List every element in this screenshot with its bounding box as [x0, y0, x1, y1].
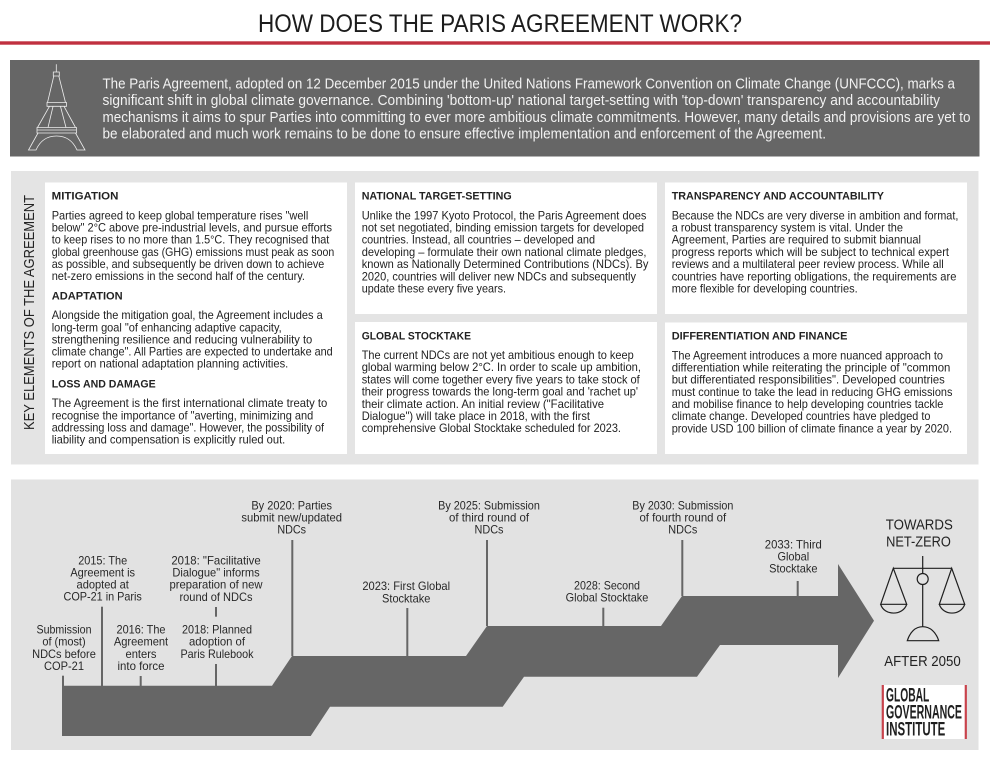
- panel: key elements: [11, 171, 978, 464]
- adaptation text: strengthening resilience and reducing vulnerability to: [52, 334, 313, 347]
- text: more flexible for developing countries.: [672, 282, 858, 296]
- logo: Global Governance Institute: [882, 685, 967, 741]
- milestone: 2018 Facilitative Dialogue: [170, 555, 263, 617]
- milestone: NDC submission: of (most): [42, 636, 86, 649]
- milestone: by 2025: [438, 499, 540, 626]
- milestone: by 2020: By 2020: Parties: [251, 499, 332, 512]
- milestone: 2023: [362, 580, 450, 656]
- mitigation text: global greenhouse gas (GHG) emissions must peak as soon: [52, 246, 334, 259]
- milestone: 2033: Stocktake: [769, 562, 817, 575]
- intro text: be elaborated and much work remains to be done to ensure effective implementation and enforcement of the Agreement.: [102, 126, 826, 142]
- milestone: NDC submission: NDCs before: [32, 648, 96, 661]
- text: a robust transparency system is vital. Under the: [672, 222, 903, 234]
- towards net-zero label: [886, 518, 953, 550]
- milestone: 2015: [64, 554, 142, 686]
- adaptation text: report on national adaptation planning activities.: [52, 358, 288, 371]
- mitigation text: [52, 209, 334, 283]
- text: their progress towards the long-term goal and 'rachet up': [362, 386, 638, 399]
- text: The Agreement introduces a more nuanced approach to: [672, 349, 943, 362]
- milestone: 2018 Facilitative Dialogue: preparation of new: [170, 579, 263, 592]
- logo: Global Governance Institute: GLOBAL: [886, 686, 930, 707]
- adaptation text: [52, 309, 333, 371]
- milestone: 2033: [765, 538, 822, 596]
- text: countries. Instead, all countries – developed and: [362, 234, 595, 247]
- text: [672, 349, 953, 435]
- card: mitigation, adaptation, loss and damage: [45, 182, 347, 454]
- intro text: significant shift in global climate governance. Combining 'bottom-up' national target-setting with 'top-down' transparency and accountability: [102, 93, 941, 109]
- heading: NATIONAL TARGET-SETTING: [362, 191, 512, 203]
- heading: DIFFERENTIATION AND FINANCE: [672, 331, 848, 343]
- mitigation text: as possible, and subsequently be driven down to achieve: [52, 258, 324, 271]
- text: global warming below 2°C. In order to scale up ambition,: [362, 361, 641, 374]
- text: developing – formulate their own national climate pledges,: [362, 246, 646, 259]
- towards net-zero label: TOWARDS: [886, 518, 953, 534]
- milestone: by 2025: NDCs: [474, 524, 504, 537]
- text: provide USD 100 billion of climate finance a year by 2020.: [672, 422, 952, 435]
- adaptation text: Alongside the mitigation goal, the Agreement includes a: [52, 309, 323, 322]
- icon: Eiffel Tower: [28, 64, 85, 150]
- text: The current NDCs are not yet ambitious enough to keep: [362, 349, 634, 362]
- title: HOW DOES THE PARIS AGREEMENT WORK?: [258, 10, 742, 38]
- milestone: 2018 Paris Rulebook: adoption of: [189, 636, 246, 649]
- text: differentiation while reiterating the principle of "common: [672, 362, 950, 374]
- milestone: by 2020: submit new/updated: [241, 512, 342, 525]
- milestone: 2018 Facilitative Dialogue: round of NDCs: [180, 591, 253, 604]
- mitigation text: net-zero emissions in the second half of the century.: [52, 270, 305, 283]
- milestone: 2016: enters: [126, 648, 157, 661]
- milestone: 2023: 2023: First Global: [362, 580, 450, 593]
- mitigation text: below" 2°C above pre-industrial levels, and pursue efforts: [52, 222, 332, 234]
- milestone: NDC submission: COP-21: [44, 660, 84, 673]
- milestone: 2018 Paris Rulebook: 2018: Planned: [182, 624, 252, 637]
- milestone: NDC submission: Submission: [36, 624, 92, 637]
- text: countries have reporting obligations, the requirements are: [672, 270, 956, 283]
- text: Dialogue") will take place in 2018, with the first: [362, 410, 591, 423]
- icon: balance scales: [881, 556, 965, 641]
- text: climate change. Developed countries have pledged to: [672, 410, 931, 423]
- milestone: 2016: Agreement: [114, 636, 169, 649]
- milestone: by 2030: of fourth round of: [639, 512, 727, 525]
- loss and damage text: liability and compensation is explicitly ruled out.: [52, 434, 285, 447]
- intro text: [102, 76, 970, 142]
- card: national target-setting: [355, 182, 657, 314]
- loss and damage text: [52, 397, 328, 447]
- text: Because the NDCs are very diverse in ambition and format,: [672, 209, 958, 222]
- milestone: by 2030: By 2030: Submission: [632, 499, 733, 512]
- milestone: NDC submission: [32, 624, 96, 686]
- milestone: 2015: COP-21 in Paris: [64, 591, 142, 604]
- milestone: by 2020: NDCs: [277, 524, 306, 537]
- text: [672, 209, 958, 296]
- towards net-zero label: NET-ZERO: [886, 534, 951, 550]
- loss and damage heading: LOSS AND DAMAGE: [52, 379, 156, 391]
- milestone: 2018 Paris Rulebook: Paris Rulebook: [180, 648, 254, 661]
- text: their climate action. An initial review ("Facilitative: [362, 398, 604, 411]
- milestone: 2016: 2016: The: [116, 624, 166, 637]
- text: Unlike the 1997 Kyoto Protocol, the Paris Agreement does: [362, 209, 647, 222]
- text: [362, 349, 641, 435]
- milestone: by 2030: NDCs: [668, 524, 697, 537]
- card: global stocktake: [355, 322, 657, 454]
- text: progress reports which will be subject to technical expert: [672, 246, 950, 259]
- card: transparency and accountability: [665, 182, 967, 314]
- heading: GLOBAL STOCKTAKE: [362, 330, 471, 342]
- heading: TRANSPARENCY AND ACCOUNTABILITY: [672, 191, 884, 203]
- adaptation heading: ADAPTATION: [52, 291, 123, 303]
- milestone: 2028: 2028: Second: [574, 580, 640, 593]
- mitigation text: Parties agreed to keep global temperature rises "well: [52, 209, 308, 222]
- panel: timeline: [11, 480, 978, 750]
- milestone: 2033: Global: [777, 550, 809, 563]
- milestone: 2015: adopted at: [77, 578, 130, 592]
- loss and damage text: recognise the importance of "averting, minimizing and: [52, 409, 313, 422]
- text: [362, 209, 649, 296]
- milestone: 2033: 2033: Third: [765, 538, 822, 551]
- milestone: 2018 Facilitative Dialogue: 2018: "Facilitative: [171, 555, 261, 568]
- milestone: by 2020: [241, 499, 342, 656]
- milestone: by 2025: of third round of: [449, 512, 530, 525]
- adaptation text: long-term goal "of enhancing adaptive capacity,: [52, 322, 282, 334]
- milestone: 2016: [114, 624, 169, 686]
- card: differentiation and finance: [665, 322, 967, 454]
- stepped timeline arrow: [62, 564, 874, 736]
- milestone: 2023: Stocktake: [382, 592, 430, 605]
- text: Agreement, Parties are required to submit biannual: [672, 234, 921, 247]
- text: update these every five years.: [362, 282, 506, 296]
- milestone: 2015: Agreement is: [70, 566, 135, 579]
- mitigation text: to keep rises to no more than 1.5°C. They recognised that: [52, 234, 330, 247]
- text: and mobilise finance to help developing countries tackle: [672, 398, 943, 411]
- text: not set negotiated, binding emission targets for developed: [362, 222, 644, 234]
- milestone: 2028: [566, 580, 648, 626]
- panel: introduction: [10, 60, 980, 156]
- text: but differentiated responsibilities". Developed countries: [672, 374, 945, 387]
- logo: Global Governance Institute: INSTITUTE: [886, 720, 945, 741]
- text: 2020, countries will deliver new NDCs and subsequently: [362, 270, 636, 283]
- milestone: 2028: Global Stocktake: [566, 592, 648, 605]
- text: known as Nationally Determined Contributions (NDCs). By: [362, 258, 649, 271]
- loss and damage text: addressing loss and damage". However, the possibility of: [52, 421, 325, 434]
- milestone: by 2025: By 2025: Submission: [438, 499, 540, 512]
- milestone: 2015: 2015: The: [78, 554, 127, 567]
- mitigation heading: MITIGATION: [52, 190, 118, 202]
- after 2050 label: AFTER 2050: [884, 654, 961, 670]
- loss and damage text: The Agreement is the first international climate treaty to: [52, 397, 328, 410]
- milestone: 2016: into force: [118, 660, 164, 673]
- text: reviews and a multilateral peer review process. While all: [672, 258, 944, 271]
- milestone: by 2030: [632, 499, 733, 596]
- adaptation text: climate change". All Parties are expected to undertake and: [52, 346, 333, 359]
- milestone: 2018 Facilitative Dialogue: Dialogue" informs: [172, 567, 260, 580]
- text: states will come together every five years to take stock of: [362, 373, 640, 386]
- text: comprehensive Global Stocktake scheduled for 2023.: [362, 422, 621, 435]
- milestone: 2018 Paris Rulebook: [180, 624, 254, 686]
- vertical heading: KEY ELEMENTS OF THE AGREEMENT: [21, 195, 38, 430]
- text: must continue to take the lead in reducing GHG emissions: [672, 386, 953, 399]
